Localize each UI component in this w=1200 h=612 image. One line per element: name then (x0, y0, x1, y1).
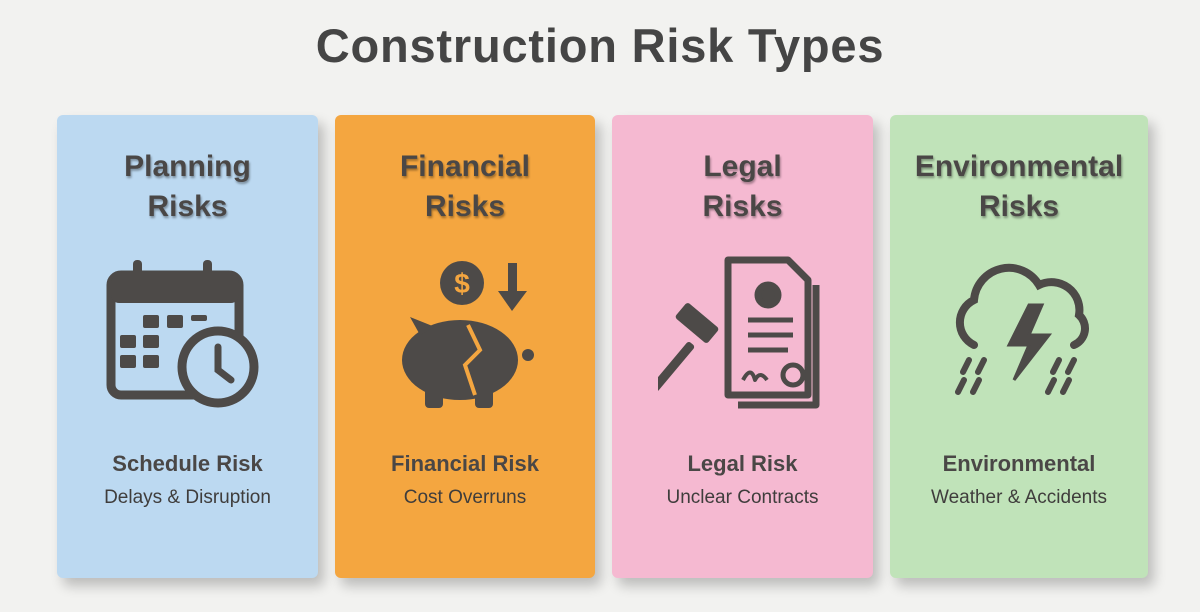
heading: environmental: Environmental (915, 150, 1123, 183)
icon: piggy bank: $ (454, 268, 470, 299)
label: schedule risk: Schedule Risk (112, 451, 263, 476)
heading: environmental: Risks (979, 190, 1059, 223)
heading: legal (702, 150, 784, 223)
icon: piggy bank (402, 261, 534, 408)
label: environmental: Environmental (943, 451, 1095, 476)
panel: financial (335, 115, 595, 578)
description: Cost Overruns (404, 487, 526, 508)
heading: financial (400, 150, 530, 223)
panel: legal (612, 115, 873, 578)
description: Unclear Contracts (666, 487, 819, 508)
heading: legal: Legal (703, 150, 782, 183)
icon: gavel and contract (658, 256, 820, 408)
heading: environmental (915, 150, 1124, 223)
heading: planning (124, 150, 251, 223)
description: Delays & Disruption (104, 487, 271, 508)
label: legal risk: Legal Risk (687, 451, 798, 476)
label: financial risk: Financial Risk (391, 451, 539, 476)
panel: planning (57, 115, 318, 578)
title: Construction Risk Types (316, 19, 884, 72)
heading: financial: Financial (400, 150, 530, 183)
description: Weather & Accidents (931, 487, 1107, 508)
heading: legal: Risks (702, 190, 783, 223)
panel: environmental (890, 115, 1148, 578)
heading: financial: Risks (425, 190, 505, 223)
icon: storm cloud (955, 264, 1089, 395)
heading: planning: Planning (124, 150, 251, 183)
icon: calendar clock (106, 260, 258, 408)
heading: planning: Risks (147, 190, 228, 223)
